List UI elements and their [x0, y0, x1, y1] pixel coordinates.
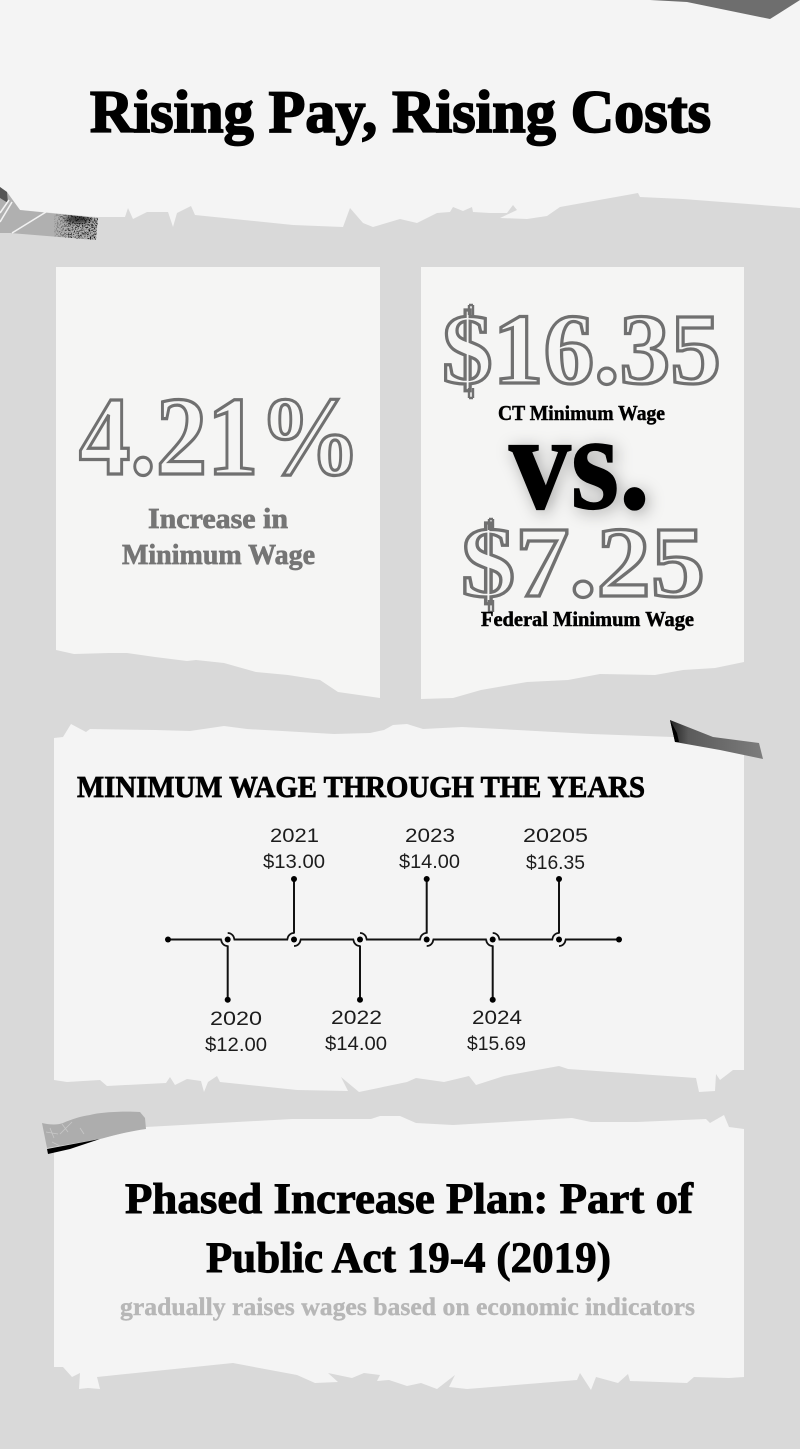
label: 2020	[205, 1009, 267, 1056]
caption: increase in minimum wage: Minimum Wage	[122, 540, 315, 571]
panel: timeline	[54, 724, 744, 1092]
caption: federal minimum wage: Federal Minimum Wage	[481, 607, 694, 631]
label: 2023: 2023	[405, 826, 455, 847]
panel: header torn paper	[0, 0, 800, 227]
heading: phased increase plan: Public Act 19-4 (2019)	[206, 1235, 611, 1282]
tape: bottom panel corner	[42, 1112, 146, 1154]
label: 20205: $16.35	[526, 853, 585, 874]
heading: phased increase plan: Phased Increase Plan: Part of	[125, 1176, 694, 1223]
label: 2023	[399, 826, 460, 873]
label: 2021: 2021	[270, 826, 319, 847]
heading: phased increase plan	[125, 1176, 694, 1282]
label: 2023: $14.00	[399, 852, 460, 873]
stat: $16.35: $16.35	[442, 293, 721, 405]
panel: phased increase plan	[54, 1115, 744, 1390]
panel: CT vs federal	[421, 267, 744, 699]
heading: minimum wage through the years: MINIMUM WAGE THROUGH THE YEARS	[77, 769, 645, 804]
label: 2022: 2022	[331, 1008, 382, 1029]
label: 2021: $13.00	[263, 852, 325, 873]
tape: timeline corner	[670, 720, 763, 759]
caption: CT minimum wage: CT Minimum Wage	[498, 401, 665, 425]
timeline chart	[165, 826, 622, 1056]
title: Rising Pay, Rising Costs	[90, 79, 711, 145]
label: 2024	[467, 1008, 526, 1055]
tape: top right	[650, 0, 800, 19]
subtext: gradually raises wages: gradually raises wages based on economic indicators	[120, 1294, 695, 1321]
label: 20205	[523, 826, 588, 874]
label: 2024: $15.69	[467, 1034, 526, 1055]
label: 2022: $14.00	[325, 1034, 387, 1055]
label: 2020: 2020	[210, 1009, 262, 1030]
vs. heading: vs.	[509, 388, 650, 538]
stat: $7.25: $7.25	[461, 506, 705, 618]
tape: top left	[0, 187, 100, 242]
caption: increase in minimum wage: Increase in	[148, 504, 288, 535]
label: 2022	[325, 1008, 387, 1055]
panel: wage increase	[56, 267, 380, 698]
label: 20205: 20205	[523, 826, 588, 847]
label: 2020: $12.00	[205, 1035, 267, 1056]
label: 2021	[263, 826, 325, 873]
stat: 4.21%: 4.21%	[79, 375, 361, 499]
label: 2024: 2024	[472, 1008, 522, 1029]
caption: increase in minimum wage	[122, 504, 315, 571]
